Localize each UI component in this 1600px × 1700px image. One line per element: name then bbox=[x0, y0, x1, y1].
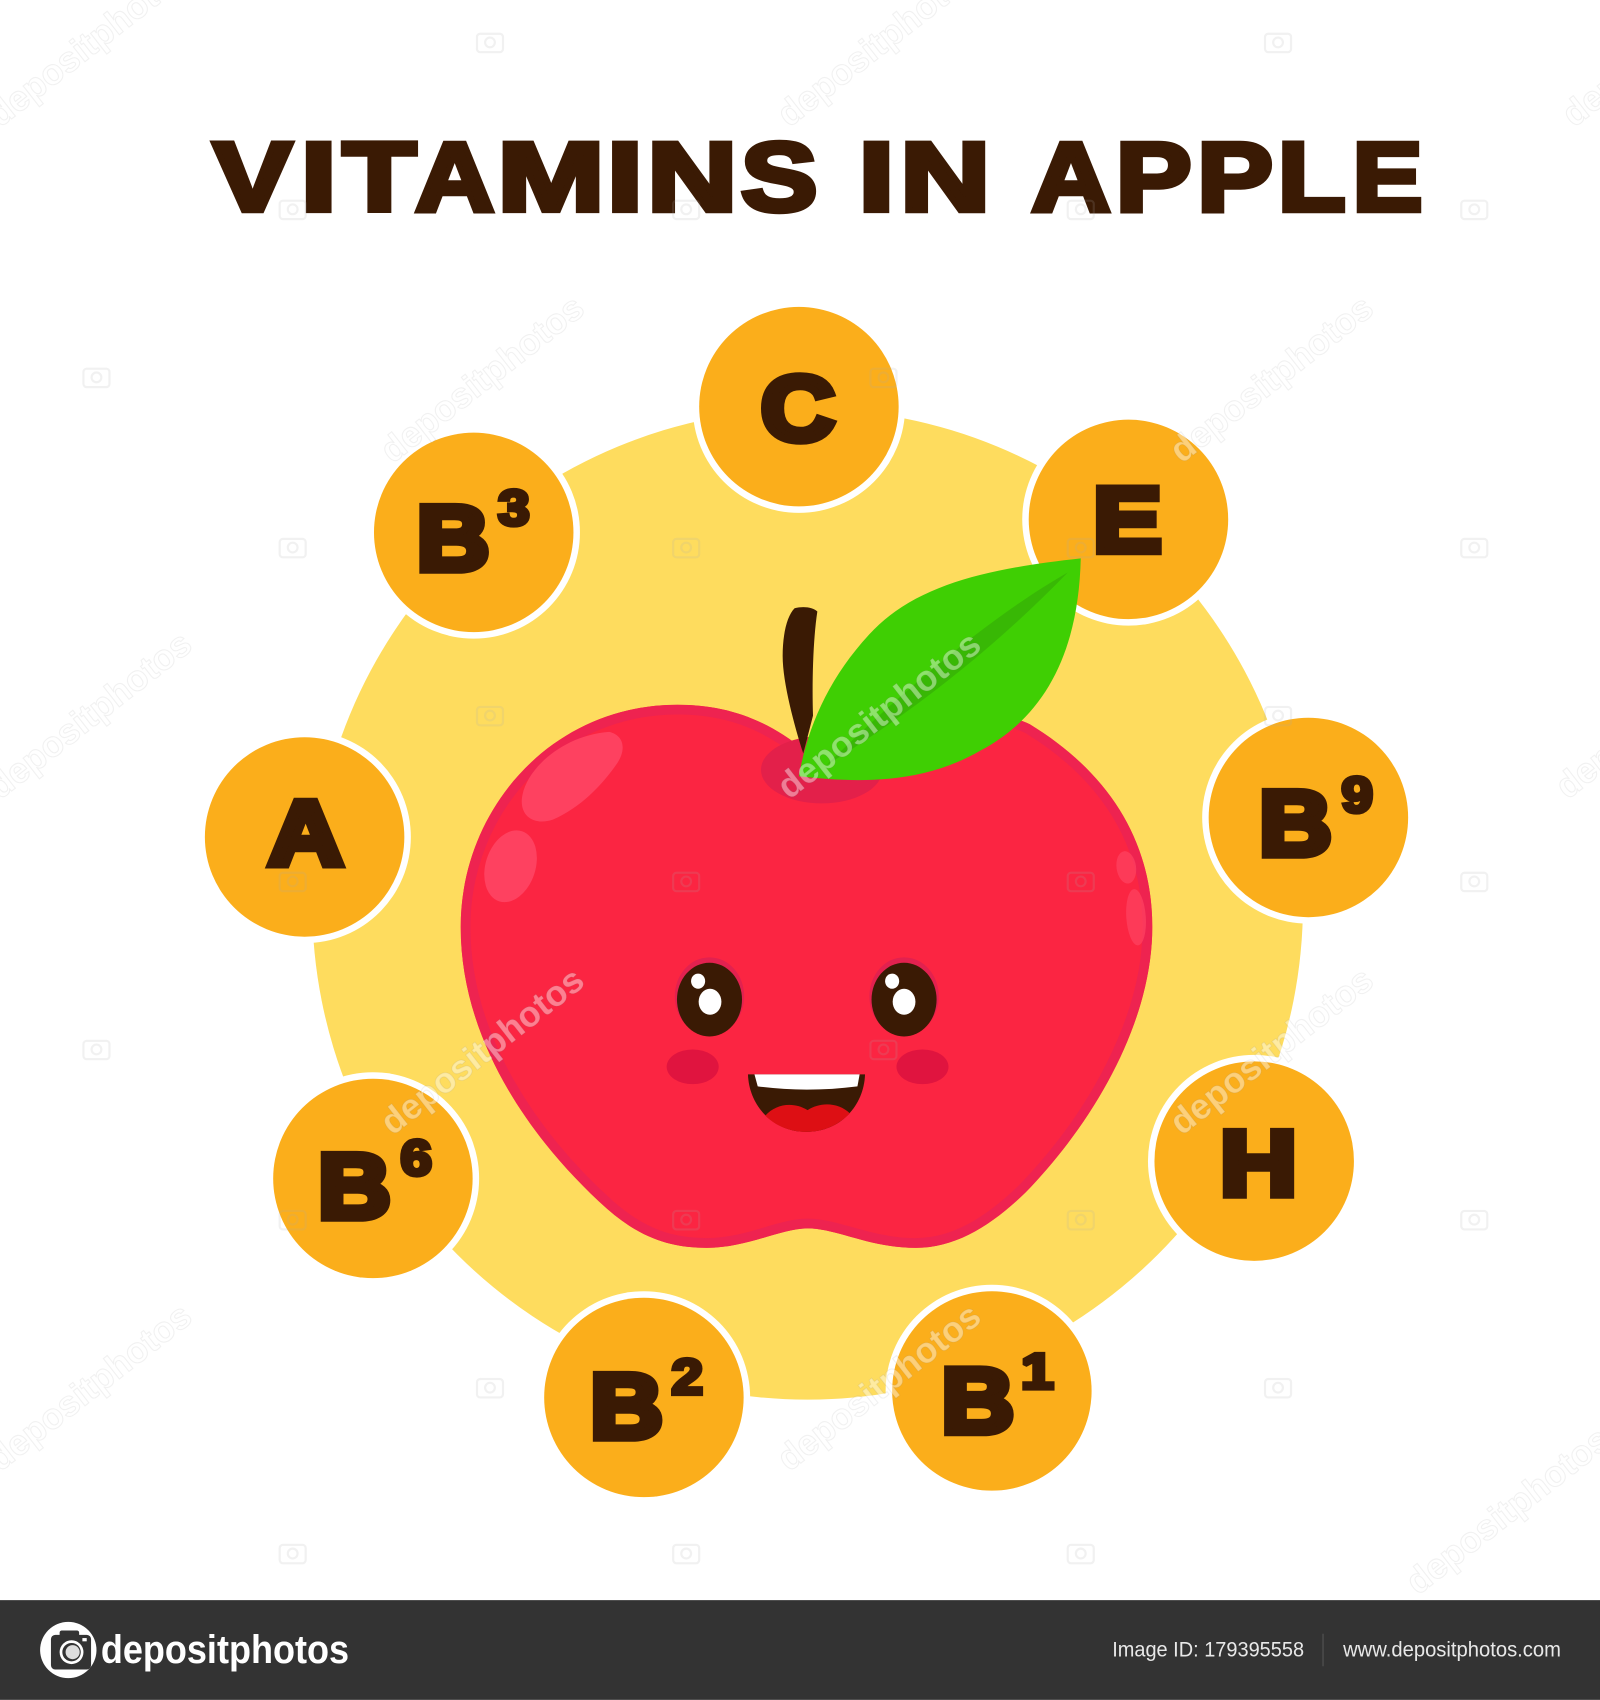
stem dimple bbox=[761, 736, 882, 803]
title: S bbox=[741, 122, 817, 231]
left cheek bbox=[667, 1049, 719, 1084]
vitamin A badge: A bbox=[268, 782, 343, 885]
vitamin B1 badge: B bbox=[941, 1350, 1014, 1453]
vitamin C badge bbox=[693, 300, 905, 513]
right eye bbox=[869, 957, 939, 1036]
vitamin B3 badge: 3 bbox=[498, 480, 530, 536]
highlights bbox=[475, 732, 1148, 946]
title: N bbox=[900, 122, 990, 231]
footer bar bbox=[0, 1600, 1600, 1700]
title: I bbox=[859, 122, 894, 231]
vitamin B6 badge bbox=[267, 1072, 479, 1285]
right cheek bbox=[896, 1049, 949, 1084]
stem bbox=[783, 607, 817, 754]
image id: Image ID: 179395558 bbox=[1112, 1639, 1304, 1662]
title: N bbox=[647, 122, 737, 231]
leaf bbox=[799, 558, 1081, 780]
vitamin C badge: C bbox=[761, 357, 835, 460]
yellow background circle bbox=[312, 409, 1303, 1400]
vitamin wheel bbox=[198, 300, 1415, 1504]
watermark: depositphotos bbox=[1162, 959, 1381, 1142]
title: M bbox=[498, 122, 604, 231]
vitamin B3 badge bbox=[367, 426, 580, 639]
title bbox=[213, 122, 1422, 231]
apple body bbox=[461, 705, 1152, 1248]
vitamin B2 badge bbox=[538, 1291, 750, 1504]
left eye bbox=[675, 957, 744, 1036]
title: I bbox=[301, 122, 337, 231]
vitamin B6 badge: B bbox=[318, 1135, 391, 1238]
footer logo icon bbox=[40, 1622, 96, 1678]
vitamin B1 badge: 1 bbox=[1021, 1344, 1054, 1400]
title: T bbox=[343, 122, 416, 231]
apple character bbox=[461, 558, 1152, 1248]
title: I bbox=[607, 122, 643, 231]
vitamin H badge: H bbox=[1220, 1112, 1297, 1215]
title: A bbox=[415, 122, 494, 231]
watermark: depositphotos bbox=[769, 623, 988, 806]
vitamin B9 badge: 9 bbox=[1341, 767, 1373, 823]
vitamin A badge bbox=[198, 731, 411, 943]
vitamin E badge bbox=[1022, 413, 1235, 626]
title: A bbox=[1032, 122, 1110, 231]
watermark: depositphotos bbox=[373, 287, 591, 470]
vitamin B2 badge: 2 bbox=[672, 1349, 703, 1405]
vitamin B6 badge: 6 bbox=[401, 1130, 432, 1186]
watermark: depositphotos bbox=[769, 1295, 988, 1479]
watermark: depositphotos bbox=[1162, 287, 1381, 470]
title: V bbox=[213, 122, 292, 231]
footer logo wordmark: depositphotos bbox=[101, 1628, 349, 1672]
vitamin B9 badge bbox=[1202, 711, 1415, 924]
watermark: depositphotos bbox=[373, 959, 591, 1142]
title: P bbox=[1116, 122, 1191, 231]
vitamin B3 badge: B bbox=[417, 487, 489, 590]
website url: www.depositphotos.com bbox=[1342, 1639, 1561, 1662]
mouth bbox=[748, 1074, 865, 1132]
title: L bbox=[1278, 122, 1345, 231]
title: P bbox=[1197, 122, 1273, 231]
title: E bbox=[1353, 122, 1422, 231]
vitamin H badge bbox=[1148, 1055, 1360, 1267]
vitamin B2 badge: B bbox=[590, 1355, 663, 1458]
vitamin B1 badge bbox=[886, 1285, 1098, 1497]
vitamin E badge: E bbox=[1093, 468, 1162, 571]
vitamin B9 badge: B bbox=[1259, 772, 1332, 875]
